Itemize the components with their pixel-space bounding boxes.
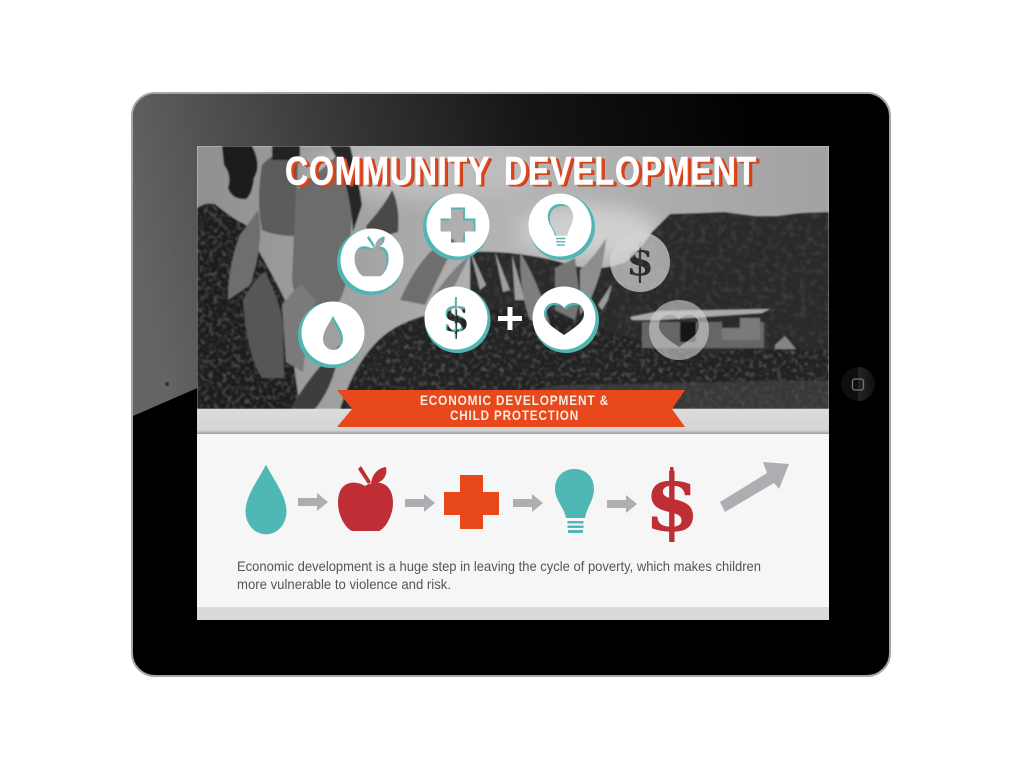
- camera: [165, 382, 169, 386]
- icon: apple circle: [337, 228, 404, 295]
- bezel: [132, 93, 890, 676]
- big arrow: [720, 462, 789, 512]
- banana leaves: [222, 146, 258, 199]
- foreground foliage: [197, 204, 829, 409]
- icon: bulb circle: [528, 194, 595, 260]
- arrow: [607, 495, 637, 513]
- icon: plus circle: [423, 194, 490, 260]
- icon: light bulb: [555, 469, 594, 533]
- icon: water drop: [246, 465, 286, 534]
- bottom grey band: [197, 607, 829, 620]
- icon: faded dollar: [610, 232, 670, 292]
- icon: apple: [338, 466, 393, 531]
- tablet frame: [132, 90, 890, 676]
- icon: dollar: $: [645, 458, 699, 549]
- icon: faded heart: [649, 300, 709, 360]
- hillside: [469, 211, 829, 356]
- icon: medical cross: [444, 475, 499, 529]
- banner text: ECONOMIC DEVELOPMENT &: [420, 392, 609, 408]
- grey band under photo: [197, 409, 829, 434]
- home button: [841, 367, 875, 401]
- body text: Economic development is a huge step in leaving the cycle of poverty, which makes children: [237, 558, 761, 574]
- arrow: [405, 494, 435, 512]
- body text: more vulnerable to violence and risk.: [237, 576, 451, 592]
- title: COMMUNITY DEVELOPMENT: [287, 150, 759, 194]
- icon: drop circle: [298, 302, 364, 368]
- banner ribbon: [337, 390, 685, 427]
- title: COMMUNITY DEVELOPMENT: [285, 150, 757, 194]
- plus sign: [498, 307, 522, 330]
- bezel gloss reflection: [133, 90, 889, 416]
- title: COMMUNITY DEVELOPMENT: [288, 152, 760, 196]
- icon: heart circle: [532, 286, 599, 353]
- arrow: [513, 494, 543, 512]
- panel: hero photo: [197, 140, 829, 409]
- house: [642, 322, 764, 348]
- arrow: [298, 493, 328, 511]
- icon: dollar circle: [424, 286, 490, 353]
- banner text: CHILD PROTECTION: [450, 407, 579, 423]
- screen: [197, 140, 829, 620]
- panel: development chain: [246, 458, 789, 549]
